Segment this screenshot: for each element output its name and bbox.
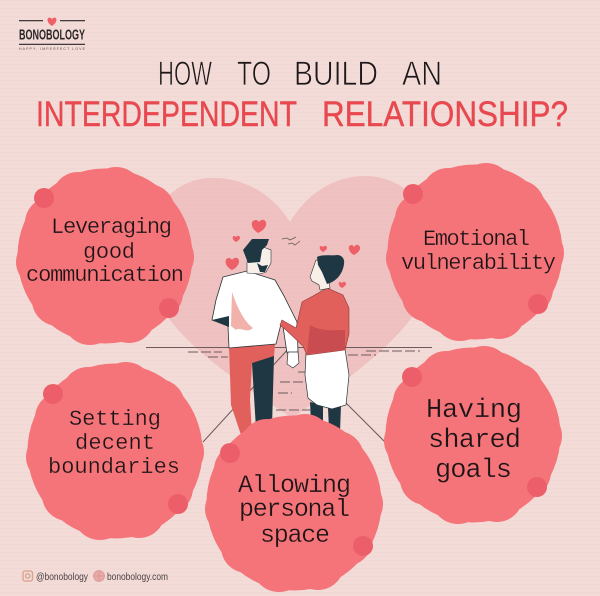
panel: Having shared goals: shared (428, 426, 521, 456)
woman: top shadow (307, 325, 345, 354)
panel: Having shared goals: Having (426, 396, 522, 426)
man: hand (287, 352, 299, 368)
title line 1: TO (237, 55, 271, 93)
title line 1: HOW (158, 55, 212, 93)
title line 2: RELATIONSHIP? (322, 95, 568, 134)
panel: Allowing personal space: personal (239, 495, 350, 524)
panel: Allowing personal space (205, 414, 383, 592)
panel: Setting decent boundaries (26, 362, 204, 540)
panel: Emotional vulnerability: vulnerability (401, 251, 556, 276)
panel: Leveraging good communication: good (83, 240, 135, 265)
logo: Bonobology: BONOBOLOGY (19, 28, 85, 44)
title line 1 (158, 55, 442, 93)
title line 1: AN (402, 55, 442, 93)
panel: Emotional vulnerability (386, 163, 564, 341)
man: shirt (212, 271, 298, 353)
hearts (252, 220, 266, 233)
woman: face and neck (310, 260, 330, 290)
woman: top (280, 288, 349, 355)
woman: legs (310, 402, 341, 432)
title line 2 (36, 95, 568, 134)
horizon and road (146, 347, 432, 442)
man: shadow on shirt (231, 292, 253, 330)
woman: skirt (305, 349, 349, 409)
man: hair and beard (243, 239, 269, 272)
woman: hair (317, 255, 344, 284)
man: sleeve shadow (212, 316, 229, 327)
large heart background (146, 176, 436, 418)
title line 1: BUILD (294, 55, 378, 93)
panel: Leveraging good communication (16, 167, 194, 345)
man: left leg (229, 343, 275, 435)
icon: logo heart (48, 18, 56, 26)
panel: Setting decent boundaries: boundaries (48, 455, 180, 480)
panel: Allowing personal space: space (260, 521, 330, 550)
panel: Setting decent boundaries: decent (75, 431, 155, 456)
footer: social handles: @bonobology (36, 571, 89, 583)
footer: social handles: bonobology.com (107, 571, 168, 583)
man: right leg (252, 356, 274, 429)
panel: Allowing personal space: Allowing (238, 471, 351, 500)
icon: globe (94, 570, 104, 582)
panel: Leveraging good communication: communication (26, 263, 184, 288)
panel: Having shared goals (384, 346, 562, 524)
icon: instagram (23, 571, 32, 581)
illustration: couple walking (212, 220, 360, 435)
panel: Setting decent boundaries: Setting (69, 407, 161, 432)
panel: Emotional vulnerability: Emotional (423, 227, 530, 252)
panel: Having shared goals: goals (435, 456, 512, 486)
man: neck and face (247, 245, 271, 274)
logo: Bonobology (19, 18, 86, 51)
footer: social handles (23, 570, 168, 583)
logo: Bonobology: HAPPY, IMPERFECT LOVE (19, 47, 86, 51)
panel: Leveraging good communication: Leveraging (51, 215, 172, 240)
birds (282, 237, 300, 245)
title line 2: INTERDEPENDENT (36, 95, 297, 134)
